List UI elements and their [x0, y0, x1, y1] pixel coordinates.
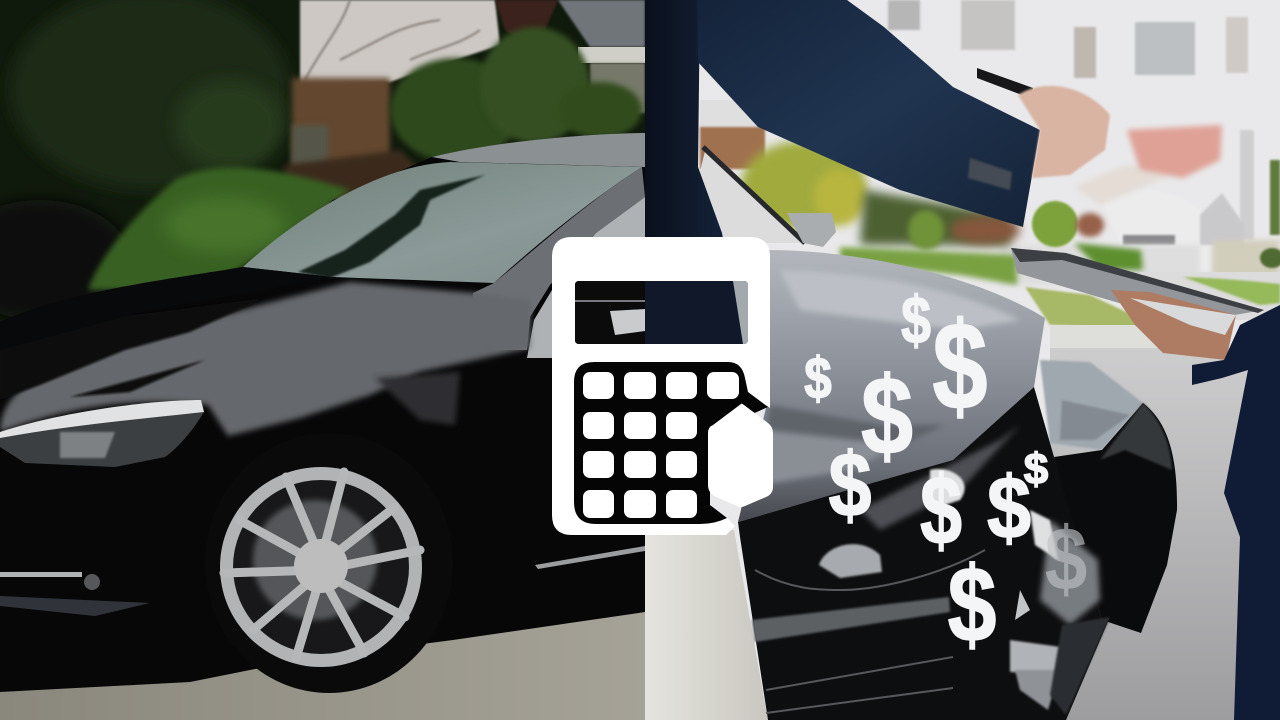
calculator keypad [574, 362, 768, 524]
windshield [243, 162, 642, 283]
side window and pillar [470, 167, 645, 350]
panel: undamaged car photo [0, 0, 645, 720]
hood reflections [0, 282, 530, 436]
crumpled fender panel [1040, 360, 1143, 450]
pen [977, 68, 1033, 98]
inspector white trousers [645, 530, 768, 720]
black fender and wheel well [1054, 403, 1177, 633]
mirror [787, 213, 836, 247]
money symbols: $ [861, 355, 913, 478]
money symbols: $ [932, 296, 988, 436]
icon: calculator [552, 237, 773, 535]
car body [0, 133, 645, 692]
windshield [698, 147, 803, 243]
money symbols: $ [1045, 508, 1087, 609]
panel: damaged car photo with inspector [645, 0, 1280, 720]
navy sleeve [697, 0, 1040, 227]
money symbols: $ [987, 458, 1031, 557]
money symbols: $ [828, 434, 872, 535]
money symbols: $ [948, 544, 996, 664]
right figure [1192, 305, 1280, 720]
money symbols [804, 282, 1087, 664]
sleeve buttons [968, 158, 1012, 190]
calculator body [552, 237, 770, 535]
background foliage and house [0, 0, 645, 322]
holding hand [1111, 290, 1236, 360]
crumpled bumper [738, 387, 1110, 720]
money symbols: $ [901, 282, 931, 357]
money symbols: $ [920, 457, 962, 565]
navy torso [645, 0, 723, 237]
background house, lawn and road [645, 0, 1280, 720]
writing hand [1018, 86, 1110, 178]
ground [0, 600, 645, 720]
money symbols: $ [804, 346, 832, 411]
money symbols: $ [1024, 445, 1048, 494]
headlight [0, 400, 204, 467]
lower body trim [535, 546, 645, 569]
calculator hexagon badge [708, 404, 773, 507]
roof [432, 133, 645, 167]
front wheel [220, 467, 426, 693]
dented hood [738, 250, 1045, 522]
clipboard [1011, 248, 1264, 315]
calculator display [575, 281, 748, 344]
far hand [1074, 125, 1222, 205]
